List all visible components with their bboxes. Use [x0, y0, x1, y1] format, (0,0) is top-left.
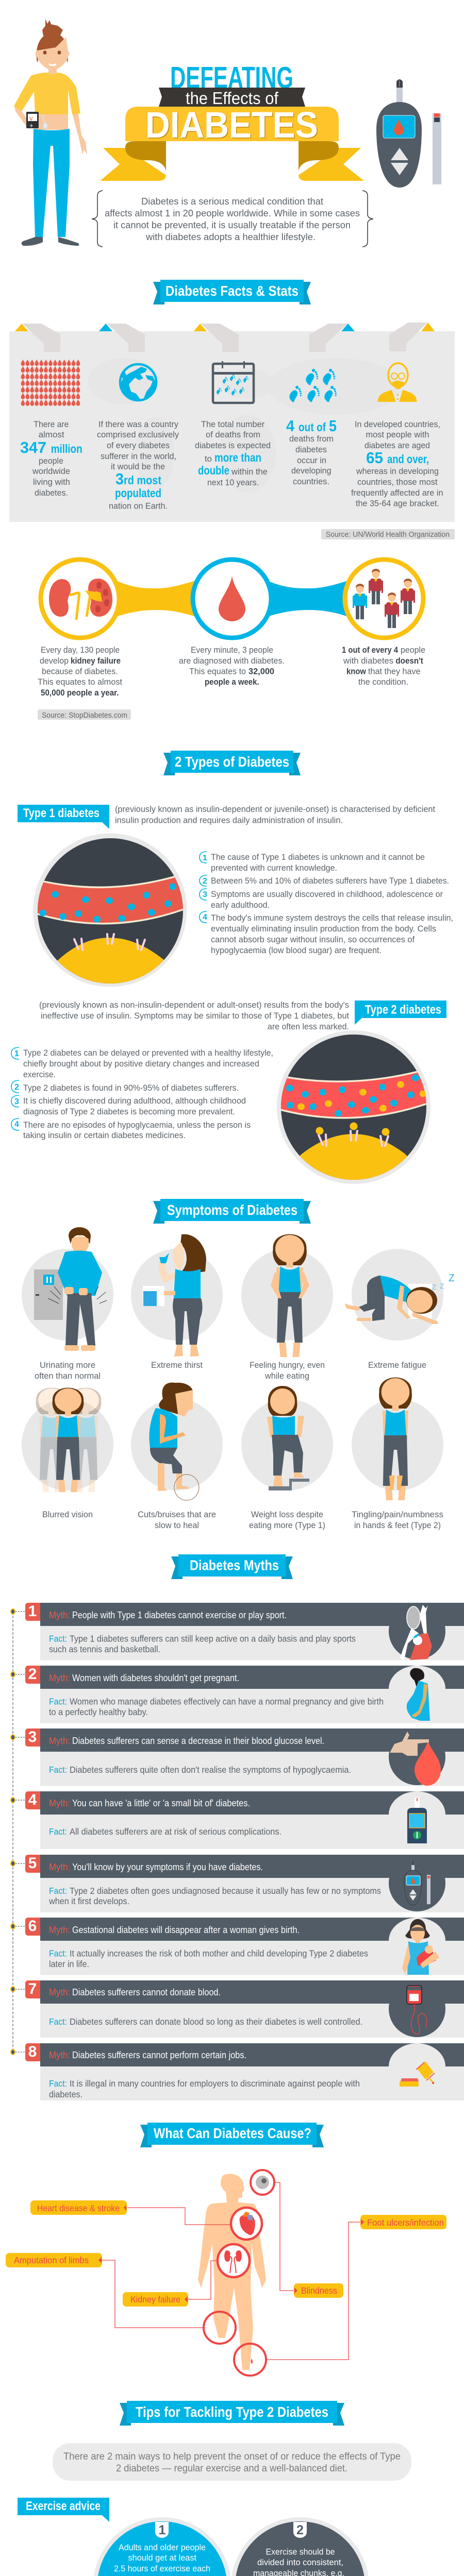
myth row 1: Fact:	[49, 1633, 67, 1643]
symptom: feeling hungry	[241, 1234, 333, 1357]
text: type 2 description	[39, 1001, 349, 1031]
text: 65 and over: countries, those most	[357, 478, 438, 487]
tip 1	[104, 2523, 219, 2576]
label: heart disease	[30, 2200, 127, 2215]
text: undiagnosed stat: with diabetes	[343, 656, 393, 666]
bullet 1: 1	[14, 1049, 19, 1058]
myth row 8: Myth:	[49, 2050, 70, 2060]
icon: pregnant woman	[407, 1668, 430, 1721]
intro text with braces: with diabetes adopts a healthier lifestyle.	[145, 232, 316, 242]
label: heart disease: Heart disease & stroke	[37, 2203, 120, 2213]
text: 65 and over	[351, 420, 443, 508]
item 4 text: eventually eliminating insulin production from the body. Cells	[211, 924, 436, 934]
tag: exercise advice	[18, 2498, 109, 2522]
bullet 4: 4	[14, 1120, 19, 1129]
banner: tips	[120, 2401, 344, 2426]
banner: what can diabetes cause: What Can Diabetes Cause?	[154, 2125, 311, 2141]
symptom labels row 1: while eating	[264, 1371, 309, 1381]
icon: gavel	[400, 2061, 435, 2087]
tag: exercise advice: Exercise advice	[26, 2499, 101, 2513]
text: kidney failure stat: Every day, 130 people	[41, 646, 120, 655]
text: 4 out of 5: diabetes	[295, 445, 327, 454]
connected circles	[41, 560, 423, 638]
text: 4 out of 5: developing	[291, 466, 331, 476]
symptom: extreme fatigue: Z	[449, 1273, 455, 1284]
myth row 6: 6	[28, 1918, 37, 1935]
text: diagnosis stat: Every minute, 3 people	[191, 646, 273, 655]
text: type 1 description	[115, 805, 435, 825]
callout: two main ways: 2 diabetes — regular exercise and a well-balanced diet.	[116, 2463, 347, 2474]
text: 3rd most populated: populated	[115, 486, 161, 500]
myth row 7: Diabetes sufferers cannot donate blood.	[72, 1987, 221, 1997]
myth row 8: Fact:	[49, 2078, 67, 2089]
text: 347 million: worldwide	[32, 467, 70, 476]
myth row 2: 2	[28, 1666, 37, 1683]
myth row 4: 4	[28, 1791, 37, 1808]
text: 4 out of 5: countries.	[293, 477, 329, 486]
banner: 2 types: 2 Types of Diabetes	[175, 754, 289, 770]
text: 347 million	[20, 420, 82, 498]
bullet 1	[200, 852, 207, 863]
myth row 6	[25, 1918, 464, 1975]
intro text with braces	[92, 191, 373, 247]
text: more than double: within the	[231, 467, 268, 477]
myth row 5: You'll know by your symptoms if you have diabetes.	[72, 1862, 263, 1872]
myth row 2	[25, 1666, 464, 1723]
symptom labels row 2: eating more (Type 1)	[249, 1521, 325, 1530]
symptom: extreme fatigue	[345, 1249, 455, 1341]
icon: handheld meter	[407, 1798, 427, 1843]
circle: kidneys	[41, 560, 119, 638]
text: 4 out of 5: deaths from	[289, 434, 334, 444]
diagram: type 2 blood vessel	[273, 1030, 433, 1185]
myth row 4: Myth:	[49, 1798, 70, 1808]
item 3 text: early adulthood.	[211, 901, 270, 910]
item 1 text	[23, 1048, 273, 1079]
icon: blood bag	[407, 1986, 427, 2034]
text: undiagnosed stat: the condition.	[358, 677, 408, 687]
symptom: extreme fatigue: Z	[432, 1283, 437, 1291]
tag: type 2 diabetes	[355, 1001, 446, 1025]
label: kidney failure	[123, 2292, 188, 2307]
text: 347 million: almost	[39, 430, 64, 439]
text: more than double: The total number	[201, 420, 264, 429]
myth row 6: later in life.	[49, 1959, 89, 1969]
text: type 2 description: are often less marked.	[268, 1022, 349, 1031]
tag: type 1 diabetes: Type 1 diabetes	[23, 806, 100, 820]
eye circle	[251, 2170, 274, 2195]
myth row 3: 3	[28, 1728, 37, 1745]
bullet 2: 2	[14, 1083, 19, 1092]
text: undiagnosed stat: that they have	[368, 667, 421, 676]
item 1 text: chiefly brought about by positive dietary changes and increased	[23, 1059, 259, 1069]
myth row 8: It is illegal in many countries for employers to discriminate against people with	[70, 2078, 360, 2089]
icon: older man	[377, 363, 417, 402]
text: 3rd most populated: nation on Earth.	[109, 502, 168, 511]
text: 4 out of 5: 5	[329, 417, 337, 435]
tag: type 2 diabetes: Type 2 diabetes	[365, 1003, 441, 1017]
bullet 3: 3	[14, 1097, 19, 1106]
text: undiagnosed stat: know	[346, 667, 366, 676]
title	[100, 61, 364, 181]
symptom labels row 2: slow to heal	[155, 1521, 199, 1530]
item 3 text: It is chiefly discovered during adulthood, although childhood	[23, 1096, 246, 1106]
text: 4 out of 5: 4	[286, 417, 295, 435]
myth row 2: Fact:	[49, 1697, 67, 1707]
source note: StopDiabetes: Source: StopDiabetes.com	[42, 711, 127, 720]
text: 65 and over: frequently affected are in	[351, 488, 443, 498]
circle: blood drop	[193, 560, 271, 638]
symptom labels row 1: Extreme thirst	[151, 1361, 203, 1370]
text: 65 and over: whereas in developing	[356, 467, 439, 476]
item 1 text: Type 2 diabetes can be delayed or prevented with a healthy lifestyle,	[23, 1048, 273, 1058]
body silhouette	[198, 2174, 266, 2370]
myth row 5: when it first develops.	[48, 1896, 129, 1906]
icon: grid of drops	[21, 360, 80, 406]
item 2 text: Type 2 diabetes is found in 90%-95% of diabetes sufferers.	[23, 1083, 239, 1093]
tip 1: Adults and older people	[119, 2543, 206, 2552]
myth row 8: Diabetes sufferers cannot perform certain jobs.	[72, 2050, 246, 2060]
number tabs	[71, 2522, 394, 2576]
myth row 8	[25, 2043, 464, 2100]
item 1 text: prevented with current knowledge.	[211, 863, 337, 873]
symptom: weight loss	[241, 1386, 333, 1490]
myth row 8: 8	[28, 2043, 37, 2060]
icon: footprints	[289, 369, 337, 402]
myth row 8: diabetes.	[49, 2089, 82, 2099]
text: 347 million: people	[39, 456, 63, 466]
arrows with triangles	[15, 323, 435, 352]
myth row 5: Myth:	[49, 1862, 70, 1872]
text: more than double: next 10 years.	[207, 478, 259, 487]
text: kidney failure stat: This equates to almost	[38, 677, 122, 687]
item 4 text: There are no episodes of hypoglycaemia, unless the person is	[23, 1121, 251, 1130]
myth row 2: to a perfectly healthy baby.	[49, 1707, 148, 1717]
item 4 text: cannot absorb sugar without insulin, so occurrences of	[211, 935, 415, 944]
diagram: body complications	[6, 2170, 446, 2376]
text: 347 million: There are	[34, 420, 69, 429]
label: blindness: Blindness	[301, 2285, 337, 2296]
exercise flower diagram	[10, 2519, 455, 2576]
myth row 4: You can have 'a little' or 'a small bit of' diabetes.	[72, 1798, 250, 1808]
icon: glucose meter	[376, 79, 441, 188]
symptom: blurred vision	[22, 1388, 113, 1492]
text: more than double	[195, 420, 271, 487]
callout: two main ways	[53, 2443, 411, 2481]
icon: mother and baby	[402, 1919, 439, 1975]
timeline of myths	[11, 1609, 25, 2055]
text: diagnosis stat: people a week.	[205, 677, 259, 687]
label: amputation: Amputation of limbs	[14, 2255, 89, 2265]
symptom labels row 2: Cuts/bruises that are	[138, 1510, 216, 1519]
symptom labels row 2: Blurred vision	[42, 1510, 93, 1519]
circle: group of people	[345, 560, 423, 638]
icon: tennis player	[400, 1605, 432, 1660]
symptom labels row 1: often than normal	[35, 1371, 101, 1381]
banner: symptoms	[153, 1199, 311, 1224]
tip 2: divided into consistent,	[257, 2558, 343, 2567]
text: 347 million: living with	[33, 478, 70, 487]
text: 3rd most populated: rd most	[124, 473, 161, 487]
text: kidney failure stat: kidney failure	[71, 656, 121, 666]
label: amputation	[6, 2253, 102, 2267]
text: 65 and over: 65	[366, 449, 383, 467]
label: kidney failure: Kidney failure	[130, 2294, 180, 2304]
item 4 text	[23, 1121, 251, 1140]
myth row 7: Fact:	[49, 2016, 67, 2027]
myth row 7	[25, 1980, 464, 2038]
myth row 1: People with Type 1 diabetes cannot exercise or play sport.	[72, 1610, 287, 1620]
title: DIABETES	[145, 105, 318, 146]
icon: globe	[120, 364, 156, 401]
banner: what can diabetes cause	[140, 2123, 324, 2147]
text: 347 million: diabetes.	[35, 488, 68, 498]
banner: symptoms: Symptoms of Diabetes	[167, 1202, 297, 1218]
label: foot ulcers	[360, 2215, 446, 2229]
bullet 1	[11, 1047, 19, 1059]
text: 65 and over: the 35-64 age bracket.	[356, 499, 439, 508]
intro text with braces: Diabetes is a serious medical condition that	[141, 196, 323, 207]
text: 347 million: million	[51, 442, 82, 455]
text: undiagnosed stat: people	[401, 646, 425, 655]
title: DIABETES	[146, 106, 319, 146]
icon: calendar of footprints	[213, 361, 254, 403]
diagram: type 1 blood vessel	[31, 834, 191, 989]
text: 4 out of 5	[286, 417, 337, 486]
foot circle	[234, 2344, 266, 2376]
text: diagnosis stat	[179, 646, 285, 687]
symptom: extreme fatigue: Z	[440, 1282, 444, 1290]
symptom: extreme thirst	[131, 1234, 223, 1357]
icon: woman with insulin pump: v	[29, 114, 33, 122]
text: diagnosis stat: 32,000	[248, 667, 274, 676]
text: 65 and over: and over,	[387, 452, 429, 466]
text: kidney failure stat	[38, 646, 122, 698]
text: type 1 description: (previously known as insulin-dependent or juvenile-onset) is characterised by deficient	[115, 805, 435, 814]
myth row 5: Type 2 diabetes often goes undiagnosed because it usually has few or no symptoms	[70, 1886, 381, 1896]
myth row 6: Myth:	[49, 1925, 70, 1935]
source note: WHO: Source: UN/World Health Organization	[326, 530, 450, 539]
banner: facts and stats: Diabetes Facts & Stats	[165, 283, 299, 299]
list: type 1 facts	[200, 852, 453, 955]
heart circle	[231, 2208, 262, 2240]
item 2 text: Between 5% and 10% of diabetes sufferers have Type 1 diabetes.	[211, 876, 449, 886]
item 4 text: taking insulin or certain diabetes medicines.	[23, 1131, 186, 1140]
myth row 7: 7	[28, 1980, 37, 1997]
tip 2: Exercise should be	[266, 2548, 335, 2557]
tip 2: 2	[296, 2523, 304, 2537]
myth row 5: Fact:	[49, 1886, 67, 1896]
item 4 text: The body's immune system destroys the cells that release insulin,	[211, 913, 453, 923]
text: 3rd most populated: sufferer in the world,	[101, 452, 176, 461]
banner: myths: Diabetes Myths	[190, 1557, 279, 1573]
text: type 2 description: (previously known as non-insulin-dependent or adult-onset) results from the body's	[39, 1001, 349, 1010]
symptom labels row 2: Tingling/pain/numbness	[352, 1510, 443, 1519]
symptom: slow healing cuts	[131, 1382, 223, 1500]
text: 3rd most populated	[97, 420, 179, 511]
text: more than double: double	[198, 464, 229, 477]
banner: 2 types	[163, 751, 301, 775]
text: 3rd most populated: of every diabetes	[107, 441, 170, 450]
kidney circle	[218, 2244, 250, 2277]
banner: myths	[171, 1554, 293, 1579]
myth row 4: All diabetes sufferers are at risk of serious complications.	[70, 1826, 281, 1837]
text: more than double: of deaths from	[206, 430, 260, 439]
myth row 4	[25, 1791, 464, 1849]
tip 1: 2.5 hours of exercise each	[114, 2564, 210, 2573]
text: 347 million: 347	[20, 438, 46, 456]
list: type 2 facts	[11, 1047, 273, 1140]
myth row 2: Women who manage diabetes effectively can have a normal pregnancy and give birth	[70, 1697, 384, 1707]
text: type 2 description: ineffective use of insulin. Symptoms may be similar to those of Type 1 diabetes, but	[41, 1011, 349, 1021]
myth row 1: Type 1 diabetes sufferers can still keep active on a daily basis and play sports	[70, 1633, 356, 1643]
text: 4 out of 5: out of	[299, 420, 326, 434]
text: 3rd most populated: comprised exclusively	[97, 430, 179, 439]
symptom: tingling	[352, 1378, 443, 1500]
icon: meter and strip	[404, 1861, 430, 1905]
myth row 1	[25, 1603, 464, 1660]
icon: woman with insulin pump	[14, 19, 87, 246]
item 4 text	[211, 913, 453, 955]
panel: facts and stats	[9, 323, 455, 522]
bullet 2	[11, 1080, 19, 1093]
symptom: urinating more often	[22, 1227, 113, 1351]
label: foot ulcers: Foot ulcers/infection	[367, 2217, 444, 2228]
label: blindness	[294, 2283, 343, 2298]
callout: two main ways: There are 2 main ways to help prevent the onset of or reduce the effects of Type	[63, 2451, 401, 2462]
item 4 text: hypoglycaemia (low blood sugar) are frequent.	[211, 946, 382, 955]
tip 2	[251, 2523, 349, 2576]
text: 65 and over: diabetes are aged	[364, 441, 430, 450]
text: undiagnosed stat: 1 out of every 4	[342, 646, 399, 655]
symptom labels row 2	[42, 1510, 443, 1530]
intro text with braces: it cannot be prevented, it is usually treatable if the person	[113, 220, 351, 230]
item 3 text	[211, 890, 443, 910]
text: 65 and over: In developed countries,	[355, 420, 440, 429]
item 3 text	[23, 1096, 246, 1116]
myth row 1: such as tennis and basketball.	[49, 1644, 160, 1654]
myth row 4: Fact:	[49, 1826, 67, 1837]
text: 3rd most populated: 3	[115, 470, 124, 488]
connector lines	[102, 2182, 360, 2360]
symptom labels row 1: Urinating more	[40, 1361, 95, 1370]
tip 1: 1	[159, 2523, 166, 2537]
text: diagnosis stat: This equates to	[189, 667, 246, 676]
myth row 6: Fact:	[49, 1948, 67, 1959]
text: kidney failure stat: 50,000 people a year.	[41, 688, 119, 698]
item 3 text: Symptoms are usually discovered in childhood, adolescence or	[211, 890, 443, 899]
text: kidney failure stat: develop	[40, 656, 69, 666]
item 3 text: diagnosis of Type 2 diabetes is becoming more prevalent.	[23, 1107, 235, 1116]
myth row 1: Myth:	[49, 1610, 70, 1620]
bullet 4: 4	[203, 913, 207, 922]
myth row 3: Diabetes sufferers can sense a decrease in their blood glucose level.	[72, 1736, 324, 1746]
myth row 6: Gestational diabetes will disappear after a woman gives birth.	[72, 1925, 300, 1935]
title: DEFEATING	[170, 61, 293, 95]
text: 3rd most populated: If there was a country	[98, 420, 179, 429]
myth row 3	[25, 1728, 464, 1786]
myth row 7: Diabetes sufferers can donate blood so long as their diabetes is well controlled.	[70, 2016, 362, 2027]
myth row 5	[25, 1855, 464, 1912]
petals	[10, 2519, 455, 2576]
item 1 text: exercise.	[23, 1070, 56, 1079]
text: more than double: more than	[214, 451, 261, 464]
title: the Effects of	[186, 89, 279, 108]
intro text with braces: affects almost 1 in 20 people worldwide. While in some cases	[105, 208, 360, 218]
bullet 1: 1	[203, 854, 207, 862]
myth row 7: Myth:	[49, 1987, 70, 1997]
symptom labels row 2: Weight loss despite	[251, 1510, 323, 1519]
tag: type 1 diabetes	[18, 805, 109, 829]
text: 3rd most populated: it would be the	[111, 462, 165, 471]
bullet 3: 3	[203, 890, 207, 899]
myth row 3: Diabetes sufferers quite often don't realise the symptoms of hypoglycaemia.	[70, 1765, 351, 1775]
myth row 5: 5	[28, 1855, 37, 1872]
banner: tips: Tips for Tackling Type 2 Diabetes	[136, 2404, 328, 2420]
bullet 2: 2	[203, 877, 207, 886]
icon: woman with insulin pump: +	[29, 122, 34, 129]
text: 65 and over: most people with	[366, 430, 429, 439]
text: more than double: to	[205, 454, 212, 464]
bullet 4	[11, 1118, 19, 1130]
bullet 3	[200, 889, 207, 900]
bullet 3	[11, 1095, 19, 1107]
item 1 text: The cause of Type 1 diabetes is unknown and it cannot be	[211, 853, 425, 862]
symptom labels row 1	[35, 1361, 426, 1381]
myth row 2: Women with diabetes shouldn't get pregnant.	[72, 1673, 239, 1683]
myth row 3: Fact:	[49, 1765, 67, 1775]
symptom labels row 2: in hands & feet (Type 2)	[354, 1521, 441, 1530]
text: kidney failure stat: because of diabetes.	[42, 667, 118, 676]
tip 1: should get at least	[128, 2553, 196, 2563]
leg circle	[204, 2312, 236, 2344]
bullet 4	[200, 911, 207, 923]
myth row 2: Myth:	[49, 1673, 70, 1683]
symptom labels row 1: Feeling hungry, even	[250, 1361, 325, 1370]
myth row 6: It actually increases the risk of both mother and child developing Type 2 diabetes	[70, 1948, 368, 1959]
bullet 2	[200, 875, 207, 886]
icon: finger prick with drop	[390, 1732, 441, 1786]
myth row 1: 1	[28, 1603, 37, 1620]
item 1 text	[211, 853, 425, 873]
text: undiagnosed stat	[342, 646, 425, 687]
symptom labels row 1: Extreme fatigue	[368, 1361, 426, 1370]
banner: facts and stats	[153, 280, 311, 304]
text: undiagnosed stat: doesn't	[395, 656, 423, 666]
myth row 3: Myth:	[49, 1736, 70, 1746]
text: diagnosis stat: are diagnosed with diabetes.	[179, 656, 285, 666]
text: type 1 description: insulin production and requires daily administration of insulin.	[115, 816, 343, 825]
text: more than double: diabetes is expected	[195, 441, 271, 450]
text: 4 out of 5: occur in	[297, 456, 326, 465]
